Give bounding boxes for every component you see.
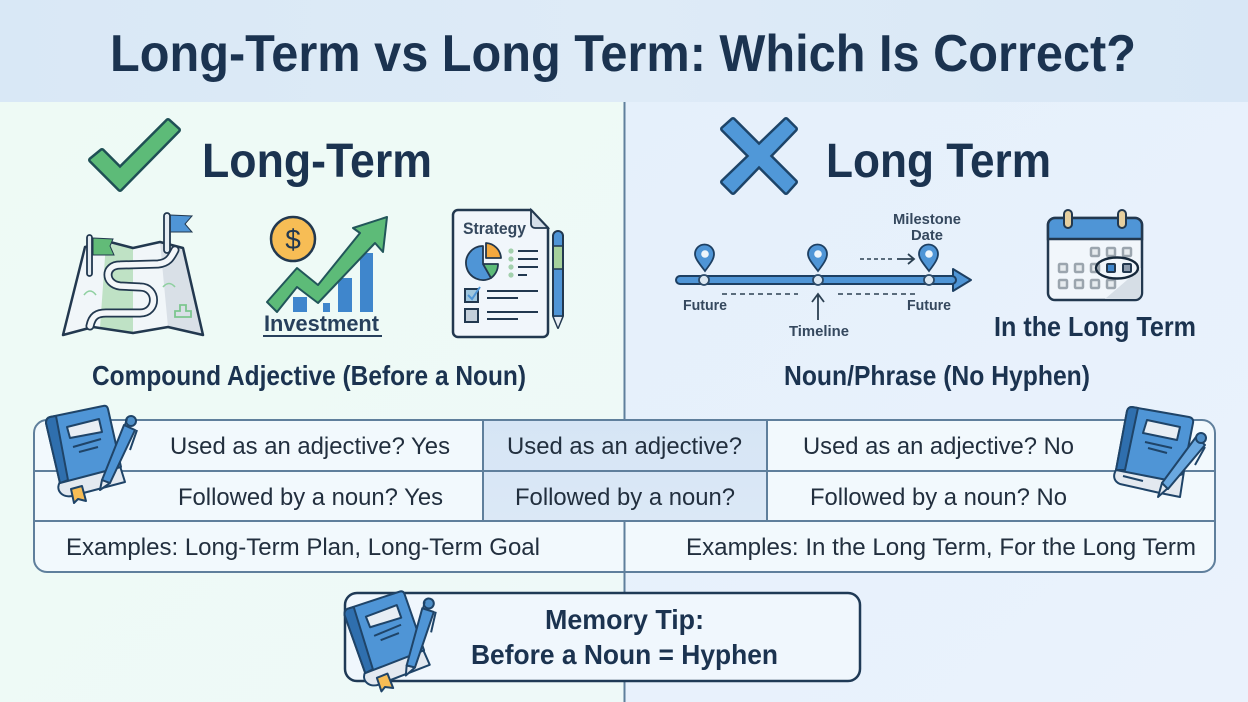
icon: timeline: Timeline [789,323,849,340]
memory tip line 1: Memory Tip: [545,604,704,635]
memory tip box [345,593,860,681]
panel: left background [0,102,624,702]
icon: timeline: Date [911,227,943,244]
row 2 left: Followed by a noun? Yes [178,484,443,511]
panel: right background [624,102,1248,702]
row 3 right: Examples: In the Long Term, For the Long Term [686,534,1196,561]
icon: strategy document with pen: Strategy [463,219,526,238]
label: In the Long Term: In the Long Term [994,311,1196,342]
title: Long-Term vs Long Term: Which Is Correct? [110,25,1136,83]
icon: strategy document with pen [453,210,563,337]
icon: timeline: Future [907,297,951,314]
icon: investment growth chart: $ [285,224,301,255]
memory tip line 2: Before a Noun = Hyphen [471,639,778,670]
icon: calendar [1048,210,1142,300]
icon: book and pen, right [1114,407,1206,497]
comparison table [34,420,1215,572]
row 1 right: Used as an adjective? No [803,433,1074,460]
icon: roadmap with flags [63,213,203,335]
icon: timeline [676,211,971,340]
row 3 left: Examples: Long-Term Plan, Long-Term Goal [66,534,540,561]
icon: blue cross [723,120,795,192]
row 1 left: Used as an adjective? Yes [170,433,450,460]
heading: Long Term: Long Term [826,135,1051,188]
icon: timeline: Future [683,297,727,314]
heading: Long-Term: Long-Term [202,135,432,188]
subheading: compound adjective: Compound Adjective (Before a Noun) [92,360,526,391]
icon: book and pen, memory tip [343,588,444,695]
row 1 middle: Used as an adjective? [507,433,742,460]
icon: investment growth chart [263,217,387,336]
icon: green check mark [91,121,178,189]
icon: book and pen, left [46,406,137,503]
row 2 right: Followed by a noun? No [810,484,1067,511]
icon: investment growth chart: Investment [264,311,380,336]
subheading: noun or phrase: Noun/Phrase (No Hyphen) [784,360,1090,391]
header band [0,0,1248,102]
row 2 middle: Followed by a noun? [515,484,735,511]
icon: timeline: Milestone [893,211,961,228]
